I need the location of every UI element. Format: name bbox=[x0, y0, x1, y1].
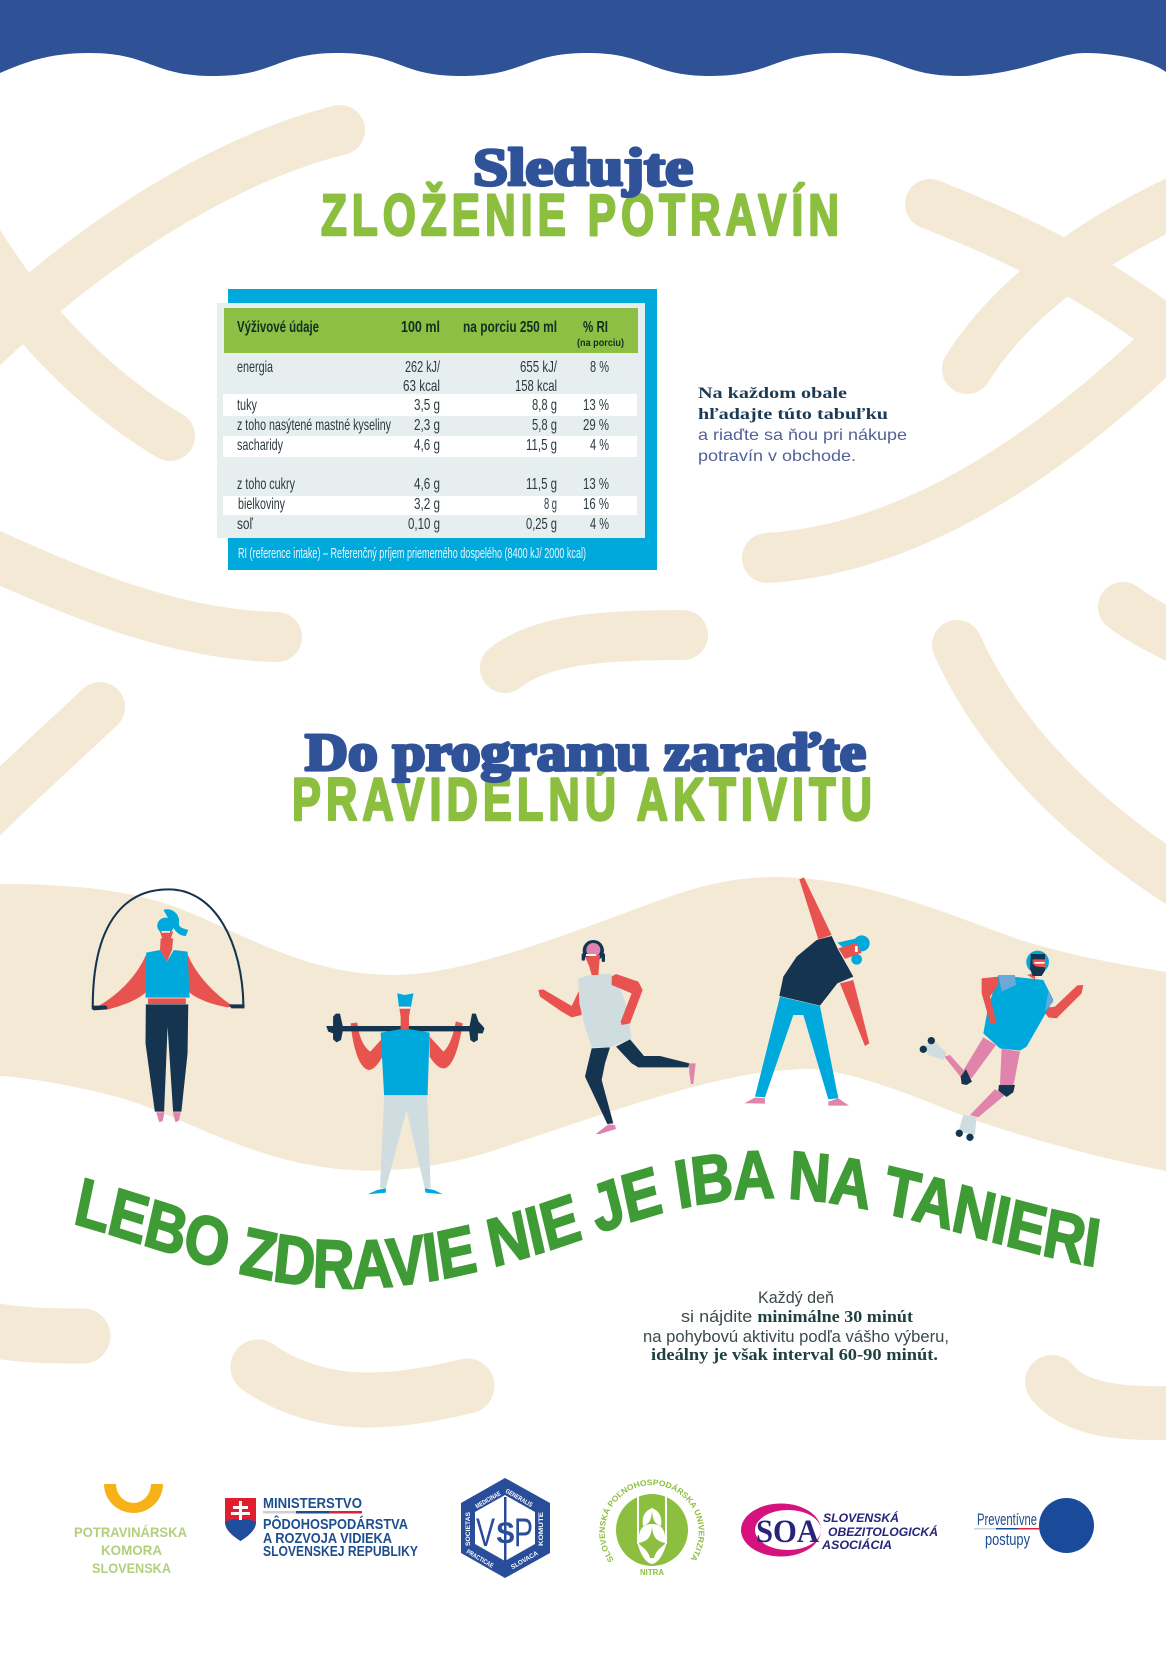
logo: Potravinárska komora Slovenska bbox=[74, 1484, 187, 1576]
logo: hexagon VŠP society: KOMUTE bbox=[538, 1511, 545, 1546]
logo: Ministerstvo pôdohospodárstva: MINISTERSTVO bbox=[263, 1495, 362, 1512]
table values percent RI: 29 % bbox=[583, 417, 609, 434]
table header: (na porciu) bbox=[577, 338, 624, 349]
text block: table advice: potravín v obchode. bbox=[698, 448, 856, 465]
table row labels: z toho cukry bbox=[237, 476, 295, 493]
table values per 100 ml: 262 kJ/ bbox=[405, 359, 440, 376]
logo: Preventívne postupy: postupy bbox=[985, 1530, 1030, 1549]
table values per portion: 11,5 g bbox=[526, 476, 557, 493]
table row labels: tuky bbox=[237, 397, 257, 414]
logo: Potravinárska komora Slovenska: KOMORA bbox=[101, 1542, 162, 1558]
heading: Do programu zaraďte pravidelnú aktivitu bbox=[292, 724, 877, 833]
heading: Sledujte zloženie potravín bbox=[321, 139, 844, 248]
table row labels: energia bbox=[237, 359, 273, 376]
logo: Slovenská obezitologická asociácia: OBEZITOLOGICKÁ bbox=[828, 1524, 938, 1539]
heading: Sledujte zloženie potravín: ZLOŽENIE POTRAVÍN bbox=[321, 183, 844, 248]
table values per 100 ml: 0,10 g bbox=[408, 516, 440, 533]
text block: table advice bbox=[698, 385, 907, 465]
table values per 100 ml: 63 kcal bbox=[403, 378, 440, 395]
white table rows bbox=[223, 394, 637, 515]
table values percent RI bbox=[583, 359, 609, 533]
beige wave band behind the figures bbox=[0, 877, 1166, 1171]
table values per portion: 11,5 g bbox=[526, 437, 557, 454]
figure: man on roller skates bbox=[920, 951, 1083, 1141]
table values per portion: 0,25 g bbox=[526, 516, 557, 533]
table row labels: z toho nasýtené mastné kyseliny bbox=[237, 417, 391, 434]
table values per portion: 8 g bbox=[544, 496, 557, 513]
logo: Slovenská poľnohospodárska univerzita: NITRA bbox=[640, 1568, 664, 1577]
figure: running woman with headphones bbox=[538, 940, 696, 1134]
logo: hexagon VŠP society: P bbox=[514, 1511, 533, 1555]
table values percent RI: 4 % bbox=[590, 516, 609, 533]
table header: % RI bbox=[583, 319, 608, 336]
text block: daily activity advice: Každý deň bbox=[758, 1288, 834, 1307]
logo: hexagon VŠP society bbox=[461, 1478, 550, 1578]
heading: Do programu zaraďte pravidelnú aktivitu: Do programu zaraďte bbox=[305, 724, 866, 782]
logo: Slovenská obezitologická asociácia bbox=[741, 1504, 938, 1556]
logo: hexagon VŠP society: V bbox=[476, 1511, 495, 1555]
logo: Slovenská poľnohospodárska univerzita: SLOVENSKÁ POĽNOHOSPODÁRSKA UNIVERZITA bbox=[599, 1480, 704, 1562]
text block: daily activity advice: si nájdite minimálne 30 minút bbox=[681, 1307, 913, 1326]
text block: table advice: hľadajte túto tabuľku bbox=[698, 406, 888, 423]
table values per portion bbox=[515, 359, 557, 533]
table header: Výživové údaje bbox=[237, 319, 319, 336]
logo: hexagon VŠP society: PRACTICAE bbox=[465, 1549, 495, 1570]
logo: Slovenská obezitologická asociácia: ASOCIÁCIA bbox=[821, 1537, 892, 1552]
table values per 100 ml: 3,5 g bbox=[414, 397, 440, 414]
top blue wavy banner bbox=[0, 0, 1166, 76]
table header: 100 ml bbox=[401, 319, 440, 336]
table values per portion: 5,8 g bbox=[532, 417, 557, 434]
table values per 100 ml: 4,6 g bbox=[414, 437, 440, 454]
figure: man with barbell bbox=[326, 993, 484, 1194]
table header bbox=[224, 308, 638, 353]
table values percent RI: 8 % bbox=[590, 359, 609, 376]
logo: Preventívne postupy bbox=[974, 1498, 1094, 1553]
text block: table advice: a riaďte sa ňou pri nákupe bbox=[698, 427, 907, 444]
logo: hexagon VŠP society: GENERALIS bbox=[504, 1488, 534, 1509]
logo: Ministerstvo pôdohospodárstva: SLOVENSKEJ REPUBLIKY bbox=[263, 1543, 418, 1560]
logo: hexagon VŠP society: MEDICINAE bbox=[474, 1490, 503, 1510]
table values per 100 ml: 3,2 g bbox=[414, 496, 440, 513]
table values percent RI: 16 % bbox=[583, 496, 609, 513]
logo: hexagon VŠP society: SLOVACA bbox=[510, 1550, 540, 1571]
text block: daily activity advice bbox=[643, 1288, 949, 1364]
table values per portion: 655 kJ/ bbox=[520, 359, 557, 376]
text block: daily activity advice: na pohybovú aktivitu podľa vášho výberu, bbox=[643, 1327, 949, 1346]
logo: hexagon VŠP society: S bbox=[496, 1517, 515, 1550]
figure: woman bending sideways bbox=[744, 877, 870, 1106]
text block: daily activity advice: ideálny je však interval 60-90 minút. bbox=[651, 1345, 938, 1364]
logo: Ministerstvo pôdohospodárstva bbox=[225, 1495, 418, 1560]
table values percent RI: 4 % bbox=[590, 437, 609, 454]
table values per 100 ml bbox=[403, 359, 440, 533]
heading: Sledujte zloženie potravín: Sledujte bbox=[473, 139, 693, 197]
table values percent RI: 13 % bbox=[583, 397, 609, 414]
table row labels: bielkoviny bbox=[238, 496, 285, 513]
table header: na porciu 250 ml bbox=[463, 319, 557, 336]
text block: table advice: Na každom obale bbox=[698, 385, 847, 402]
table footnote: RI (reference intake) – Referenčný príjem priemerného dospelého (8400 kJ/ 2000 kcal) bbox=[238, 545, 586, 562]
background pattern: beige curved strokes bbox=[0, 130, 1166, 1413]
logo: Slovenská obezitologická asociácia: SOA bbox=[756, 1514, 819, 1550]
table values per 100 ml: 4,6 g bbox=[414, 476, 440, 493]
table values percent RI: 13 % bbox=[583, 476, 609, 493]
logo: Potravinárska komora Slovenska: SLOVENSKA bbox=[92, 1560, 171, 1576]
table row labels: soľ bbox=[237, 516, 253, 533]
table values per portion: 158 kcal bbox=[515, 378, 557, 395]
heading: Do programu zaraďte pravidelnú aktivitu: PRAVIDELNÚ AKTIVITU bbox=[292, 766, 877, 833]
logo: Preventívne postupy: Preventívne bbox=[977, 1510, 1037, 1529]
table values per 100 ml: 2,3 g bbox=[414, 417, 440, 434]
logo: Potravinárska komora Slovenska: POTRAVINÁRSKA bbox=[74, 1524, 187, 1540]
figure: woman with jump rope bbox=[92, 889, 244, 1122]
logo: hexagon VŠP society: SOCIETAS bbox=[465, 1511, 472, 1546]
panel: nutrition table bbox=[217, 289, 657, 570]
table row labels: sacharidy bbox=[237, 437, 283, 454]
logo: Ministerstvo pôdohospodárstva: A ROZVOJA VIDIEKA bbox=[263, 1530, 392, 1547]
table row labels bbox=[237, 359, 391, 533]
logo: Slovenská obezitologická asociácia: SLOVENSKÁ bbox=[823, 1510, 899, 1525]
table values per portion: 8,8 g bbox=[532, 397, 557, 414]
slogan: wavy green text: LEBO ZDRAVIE NIE JE IBA NA TANIERI bbox=[75, 1150, 1100, 1290]
logo: Ministerstvo pôdohospodárstva: PÔDOHOSPODÁRSTVA bbox=[263, 1515, 408, 1533]
